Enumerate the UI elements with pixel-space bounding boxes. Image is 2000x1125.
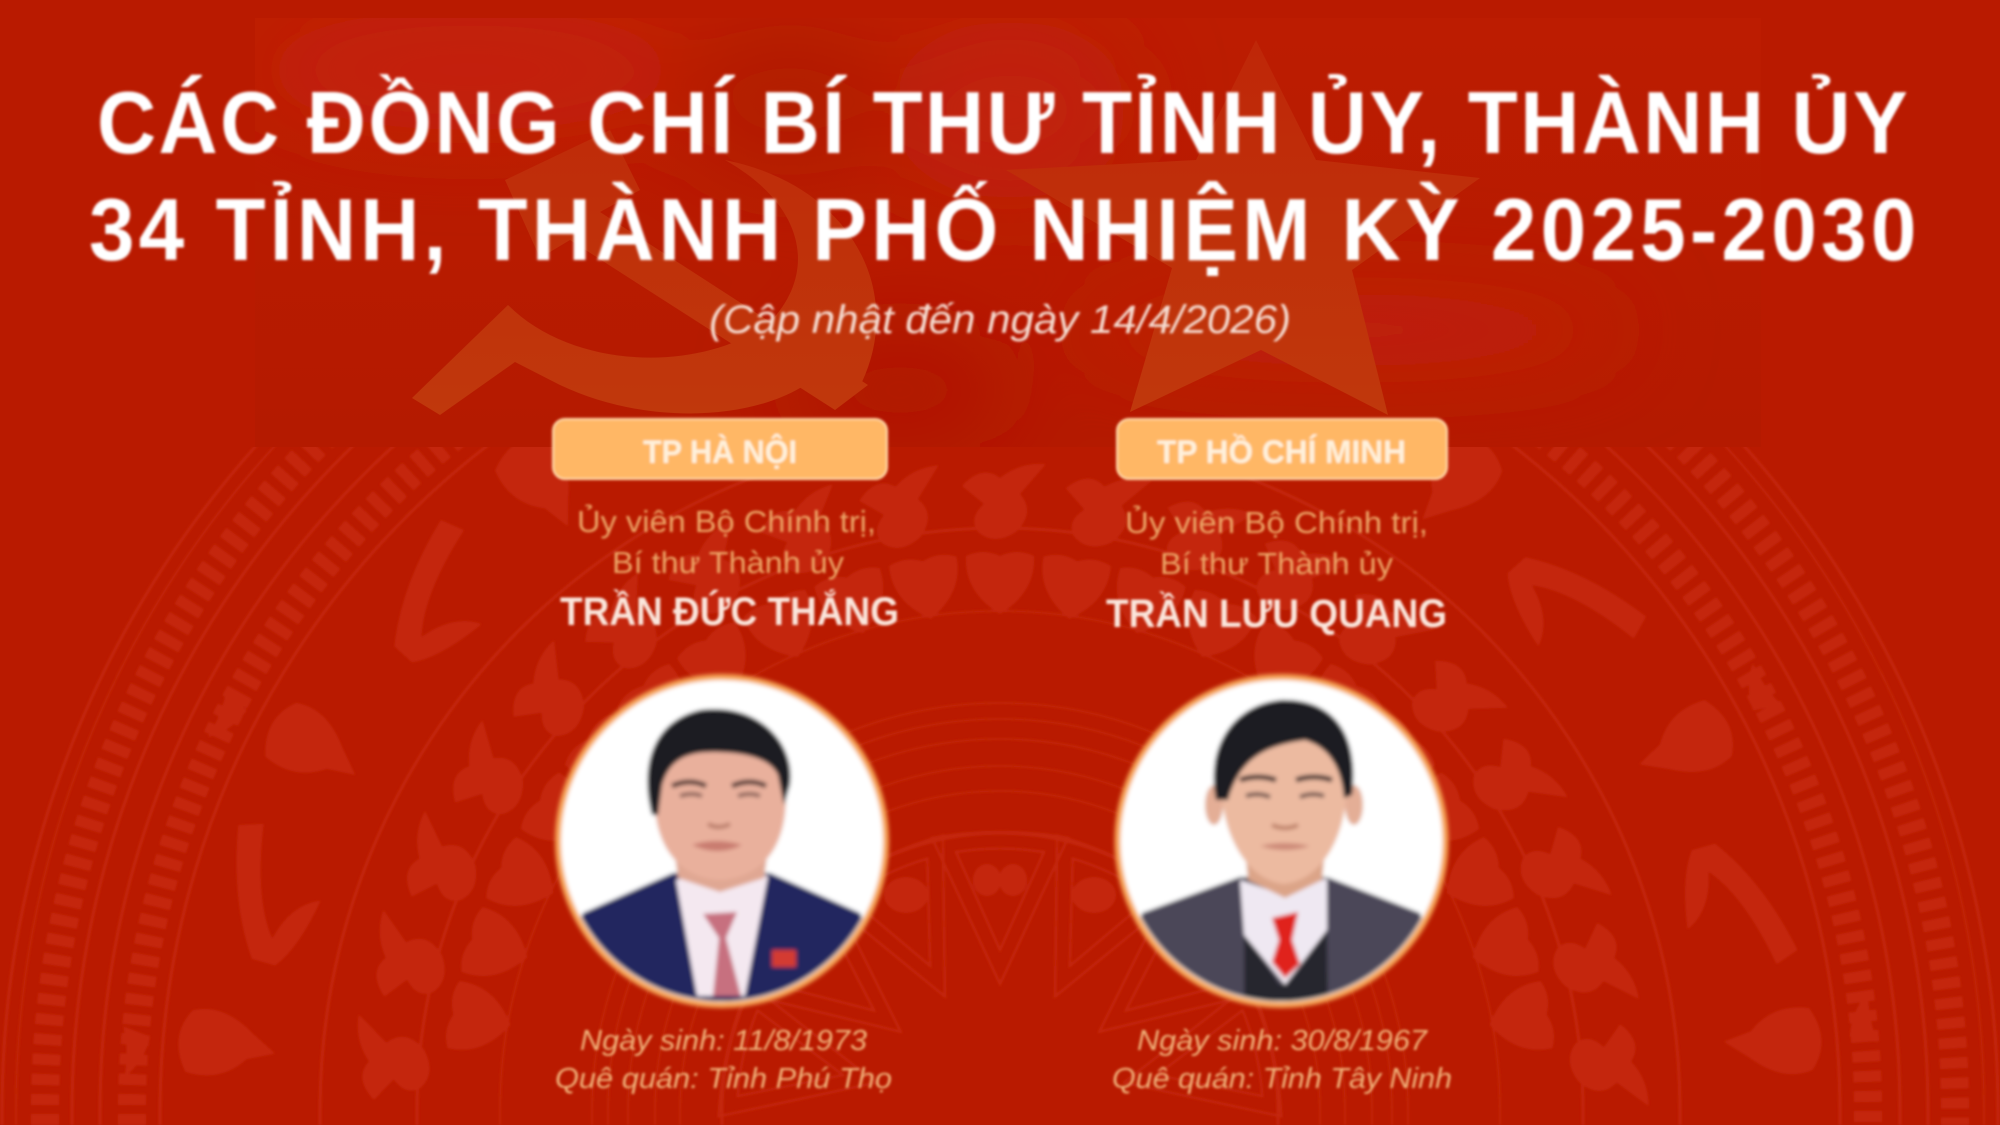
- badge: TP Hà Nội: TP HÀ NỘI: [643, 434, 797, 470]
- badge: TP Hồ Chí Minh: TP HỒ CHÍ MINH: [1157, 434, 1406, 470]
- vest: [1244, 930, 1328, 1005]
- flag with hammer, sickle and star: [280, 18, 1536, 415]
- tie: [703, 912, 741, 996]
- birth info: [1112, 1025, 1452, 1095]
- neck: [1244, 860, 1326, 900]
- shirt: [676, 868, 768, 996]
- icon: sickle: [412, 160, 876, 415]
- name: TRẦN LƯU QUANG: [1106, 590, 1447, 636]
- drum pattern: [0, 447, 2000, 1125]
- icon: hammer: [505, 130, 868, 410]
- badge: TP Hồ Chí Minh: [1117, 419, 1447, 479]
- birth info: [555, 1025, 892, 1095]
- role text: Ủy viên Bộ Chính trị,: [577, 503, 876, 539]
- face: [654, 742, 786, 880]
- name: TRẦN ĐỨC THẮNG: [560, 588, 899, 634]
- title: 34 TỈNH, THÀNH PHỐ NHIỆM KỲ 2025-2030: [89, 180, 1916, 280]
- neck: [674, 858, 768, 894]
- birth info: Ngày sinh: 11/8/1973: [580, 1025, 867, 1057]
- role text: Bí thư Thành ủy: [1160, 546, 1394, 581]
- title: CÁC ĐỒNG CHÍ BÍ THƯ TỈNH ỦY, THÀNH ỦY: [97, 73, 1908, 173]
- role text: Bí thư Thành ủy: [612, 545, 845, 580]
- subtitle: (Cập nhật đến ngày 14/4/2026): [709, 298, 1291, 342]
- column: Hồ Chí Minh: [1106, 419, 1452, 1095]
- eyes: [672, 782, 766, 786]
- title: [89, 73, 1916, 280]
- suit: [578, 870, 865, 1005]
- lapel pin: [772, 950, 796, 967]
- role text: Ủy viên Bộ Chính trị,: [1125, 504, 1428, 540]
- portrait: [1118, 677, 1450, 1010]
- face: [1221, 732, 1347, 884]
- role text: [1125, 504, 1428, 581]
- hair: [1214, 700, 1353, 800]
- shirt: [1240, 878, 1327, 985]
- birth info: Quê quán: Tỉnh Phú Thọ: [555, 1063, 892, 1095]
- column: Hà Nội: [540, 419, 900, 1095]
- icon: star: [1006, 40, 1480, 415]
- nose and mouth: [708, 824, 730, 827]
- ears: [1205, 785, 1223, 825]
- hair: [647, 709, 791, 815]
- role text: [577, 503, 876, 580]
- badge: TP Hà Nội: [553, 419, 887, 479]
- nose and mouth: [1272, 825, 1298, 828]
- birth info: Quê quán: Tỉnh Tây Ninh: [1112, 1063, 1452, 1095]
- birth info: Ngày sinh: 30/8/1967: [1137, 1025, 1429, 1057]
- portrait: [540, 677, 900, 1010]
- suit: [1138, 874, 1425, 1000]
- eyes: [1240, 777, 1332, 780]
- tie: [1272, 912, 1300, 978]
